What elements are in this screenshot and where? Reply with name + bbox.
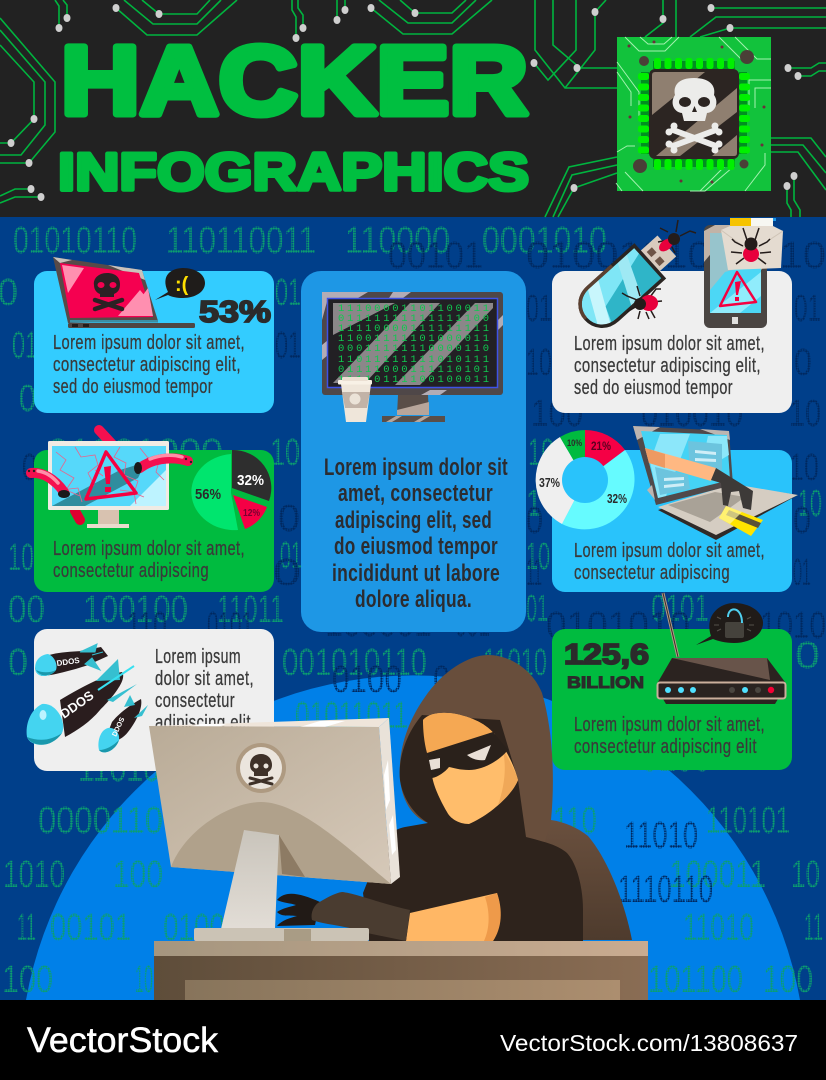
binary code background: 1110110 bbox=[618, 869, 713, 911]
binary code background: 00 bbox=[8, 589, 45, 631]
text block: Lorem ipsum dolor sit bbox=[324, 454, 508, 481]
pie chart: 56 32 12 bbox=[191, 450, 271, 530]
watermark url: VectorStock.com/13808637 bbox=[500, 1030, 798, 1056]
text block: consectetur adipiscing elit, bbox=[53, 353, 241, 376]
chip core bbox=[649, 69, 739, 159]
binary code background: 0101010 bbox=[546, 605, 690, 647]
rocket large: DDOS bbox=[57, 687, 97, 721]
text block: consectetur adipiscing elit, bbox=[574, 354, 761, 377]
credit card bbox=[719, 506, 763, 536]
binary code background: 10 bbox=[270, 432, 300, 474]
binary code background: 110000 bbox=[345, 220, 450, 262]
donut chart: 10 21 32 37 bbox=[536, 430, 635, 529]
binary code background: 01 bbox=[275, 272, 301, 314]
speech bubble: open padlock bbox=[696, 603, 763, 645]
text block: Lorem ipsum bbox=[155, 645, 241, 668]
chip pins bbox=[638, 58, 750, 170]
binary code background: 0 bbox=[526, 500, 543, 542]
binary code background: 10 bbox=[526, 342, 552, 384]
binary digits: 11011111111010111 bbox=[338, 354, 489, 366]
binary code background: 11010 bbox=[624, 815, 698, 857]
binary code background: 0100 bbox=[332, 659, 402, 701]
binary code background: 01011011 bbox=[295, 695, 408, 737]
text block bbox=[574, 332, 765, 399]
stat: 125,6 billion bbox=[564, 639, 649, 692]
footer band bbox=[0, 1000, 826, 1080]
text block: Lorem ipsum dolor sit amet, bbox=[53, 331, 245, 354]
binary code background: 100 bbox=[113, 854, 163, 896]
text block: sed do eiusmod tempor bbox=[53, 375, 213, 398]
binary code background: 01 bbox=[12, 325, 38, 367]
hacker forearm bbox=[406, 893, 500, 941]
desk bbox=[154, 941, 648, 1000]
icon: ddos rockets bbox=[27, 644, 148, 752]
binary code background: 01001000 bbox=[47, 432, 223, 474]
pie chart: 56 32 12: 12% bbox=[243, 508, 260, 519]
binary code background: 001010110 bbox=[282, 642, 427, 684]
binary code background: 110110011 bbox=[166, 220, 316, 262]
binary code background: 0100 bbox=[163, 907, 225, 949]
binary code background: 0 bbox=[794, 342, 812, 384]
binary code background: 10 bbox=[528, 432, 554, 474]
binary code background: 010010 bbox=[641, 393, 743, 435]
binary code background: 100001 bbox=[325, 603, 432, 645]
binary code background: 0 bbox=[793, 500, 811, 542]
text block: consectetur adipiscing bbox=[574, 561, 730, 584]
icon: bug on usb body bbox=[622, 286, 662, 319]
binary code background: 11010 bbox=[683, 907, 754, 949]
binary digits: 11110111100100011 bbox=[338, 374, 489, 386]
binary digits: 11001111101000011 bbox=[338, 333, 489, 345]
binary code background: 01 bbox=[280, 535, 302, 577]
binary code background: 0001010 bbox=[482, 220, 607, 262]
binary code background bbox=[0, 220, 826, 1001]
binary code background: 0 bbox=[22, 447, 37, 489]
icon: bug on usb tip bbox=[657, 220, 696, 254]
binary code background: 001 bbox=[455, 603, 490, 645]
binary code background: 1 bbox=[526, 483, 542, 525]
panel: worm virus monitor and pie bbox=[28, 430, 274, 592]
binary digits: 00011111110000110 bbox=[338, 343, 489, 355]
binary code background: 01 bbox=[526, 588, 548, 630]
text block bbox=[574, 539, 765, 584]
stat: 125,6 billion: 125,6 bbox=[564, 639, 649, 671]
binary code background: 01010110 bbox=[13, 220, 137, 262]
binary code background: 0 bbox=[19, 378, 36, 420]
background: large blue arc behind hacker bbox=[26, 675, 800, 1000]
donut chart: 10 21 32 37: 32% bbox=[607, 491, 627, 506]
donut chart: 10 21 32 37: 21% bbox=[591, 439, 611, 453]
icon: binary monitor bbox=[322, 292, 503, 422]
skull badge bbox=[236, 743, 286, 793]
title: INFOGRAPHICS bbox=[58, 143, 529, 202]
binary code background: 0 bbox=[433, 659, 450, 701]
panel: center monitor with code bbox=[301, 271, 526, 632]
hacker hood bbox=[400, 655, 553, 860]
hacker mask bbox=[427, 732, 508, 778]
icon: router bbox=[658, 593, 786, 704]
text block: amet, consectetur bbox=[338, 480, 493, 507]
text block: adipiscing elit bbox=[155, 711, 251, 734]
binary code background: 00101 bbox=[50, 907, 131, 949]
watermark logo: VectorStock bbox=[27, 1021, 219, 1060]
binary code background: 0000110 bbox=[38, 800, 163, 842]
binary digits: 11100001101100011 bbox=[338, 303, 489, 315]
binary code background: 0100 bbox=[641, 738, 711, 780]
binary code background: 0 bbox=[795, 635, 820, 677]
icon: infected usb drive bbox=[578, 236, 676, 328]
binary code background: 110 bbox=[553, 800, 597, 842]
text block: consectetur adipiscing elit bbox=[574, 735, 757, 758]
worm left bbox=[31, 473, 64, 492]
binary code background: 11 bbox=[526, 552, 542, 594]
binary code background: 0 bbox=[8, 642, 28, 684]
text block: consectetur adipiscing bbox=[53, 559, 209, 582]
text block: dolore aliqua. bbox=[355, 586, 472, 613]
icon: monitor with worms bbox=[28, 430, 192, 528]
text block: consectetur bbox=[155, 689, 235, 712]
binary code background: 110 bbox=[127, 605, 167, 647]
speech bubble: sad face: :( bbox=[175, 274, 189, 296]
stat: 125,6 billion: BILLION bbox=[567, 673, 644, 692]
binary code background: 11011 bbox=[217, 589, 284, 631]
binary code background: 10 bbox=[135, 959, 153, 1001]
speech bubble: sad face bbox=[155, 268, 205, 300]
text block bbox=[324, 454, 508, 613]
text block: sed do eiusmod tempor bbox=[574, 376, 733, 399]
computer monitor from behind bbox=[149, 718, 400, 941]
title bbox=[58, 26, 529, 202]
binary code background: 00101 bbox=[388, 235, 483, 277]
skull bbox=[666, 78, 722, 154]
circuit traces bbox=[0, 0, 826, 217]
panel: malware laptop 53% bbox=[34, 257, 274, 413]
text block bbox=[53, 537, 245, 582]
binary code background: 01 bbox=[526, 288, 552, 330]
binary digits bbox=[338, 303, 489, 386]
text block: do eiusmod tempor bbox=[334, 533, 498, 560]
hacker face bbox=[423, 713, 518, 824]
header band bbox=[0, 0, 826, 217]
binary code background: 0101 bbox=[651, 588, 709, 630]
text block bbox=[574, 713, 765, 758]
stat: 53%: 53% bbox=[199, 294, 271, 329]
binary code background: 01 bbox=[275, 325, 301, 367]
monitor stand bbox=[279, 835, 305, 877]
binary code background: 11010 bbox=[483, 642, 547, 684]
hacker glove bbox=[312, 892, 410, 941]
binary code background: 100 bbox=[531, 393, 583, 435]
binary code background: 0101 bbox=[207, 605, 253, 647]
hacker figure at desk bbox=[149, 655, 648, 1000]
binary code background: 0 bbox=[273, 552, 301, 594]
title: HACKER bbox=[61, 26, 528, 135]
fingers bbox=[277, 894, 320, 926]
binary code background: 100 bbox=[763, 959, 813, 1001]
icon: infected envelope bbox=[721, 218, 783, 270]
rocket small top: DDOS bbox=[56, 656, 81, 668]
text block: Lorem ipsum dolor sit amet, bbox=[53, 537, 245, 560]
gloved hand bbox=[645, 448, 716, 481]
coffee cup bbox=[338, 377, 372, 422]
panel: DDoS rockets bbox=[27, 629, 274, 771]
binary code background: 0100101010010 bbox=[526, 235, 826, 277]
binary code background: 101100 bbox=[648, 959, 743, 1001]
icon: laptop with hand stealing card bbox=[633, 426, 798, 540]
binary code background: 11 bbox=[17, 907, 36, 949]
text block: dolor sit amet, bbox=[155, 667, 254, 690]
pie chart: 56 32 12: 32% bbox=[237, 472, 264, 489]
monitor base bbox=[194, 928, 369, 941]
panel: donut chart and stolen card laptop bbox=[536, 426, 798, 592]
donut chart: 10 21 32 37: 37% bbox=[539, 475, 560, 490]
binary digits: 01111000111110101 bbox=[338, 364, 489, 376]
panel: infected usb and phone bbox=[552, 218, 792, 413]
rocket small bottom: DDOS bbox=[111, 716, 126, 738]
binary digits: 11110000111111111 bbox=[338, 323, 489, 335]
binary code background: 10 bbox=[526, 536, 550, 578]
binary code background: 100011 bbox=[669, 854, 766, 896]
binary code background: 100 bbox=[2, 959, 53, 1001]
donut chart: 10 21 32 37: 10% bbox=[567, 438, 582, 449]
hacker body bbox=[363, 715, 583, 941]
background: blue field bbox=[0, 217, 826, 1000]
icon: laptop with skull bbox=[53, 257, 195, 328]
panel: router breach stat bbox=[552, 593, 792, 770]
worm right bbox=[140, 458, 188, 468]
binary code background: 0 bbox=[278, 498, 300, 540]
binary digits: 01111111111111100 bbox=[338, 313, 489, 325]
binary code background: 10 bbox=[8, 537, 34, 579]
hacker shoulder bbox=[540, 820, 632, 940]
pie chart: 56 32 12: 56% bbox=[195, 486, 221, 503]
text block bbox=[155, 645, 254, 734]
icon: skull microchip bbox=[616, 37, 771, 191]
binary code background: 11010 bbox=[78, 748, 160, 790]
text block: adipiscing elit, sed bbox=[335, 507, 492, 534]
binary code background: 1010 bbox=[3, 854, 65, 896]
icon: smartphone with alert bbox=[704, 225, 767, 328]
binary code background: 100100 bbox=[83, 589, 188, 631]
text block bbox=[53, 331, 245, 398]
text block: incididunt ut labore bbox=[332, 560, 500, 587]
